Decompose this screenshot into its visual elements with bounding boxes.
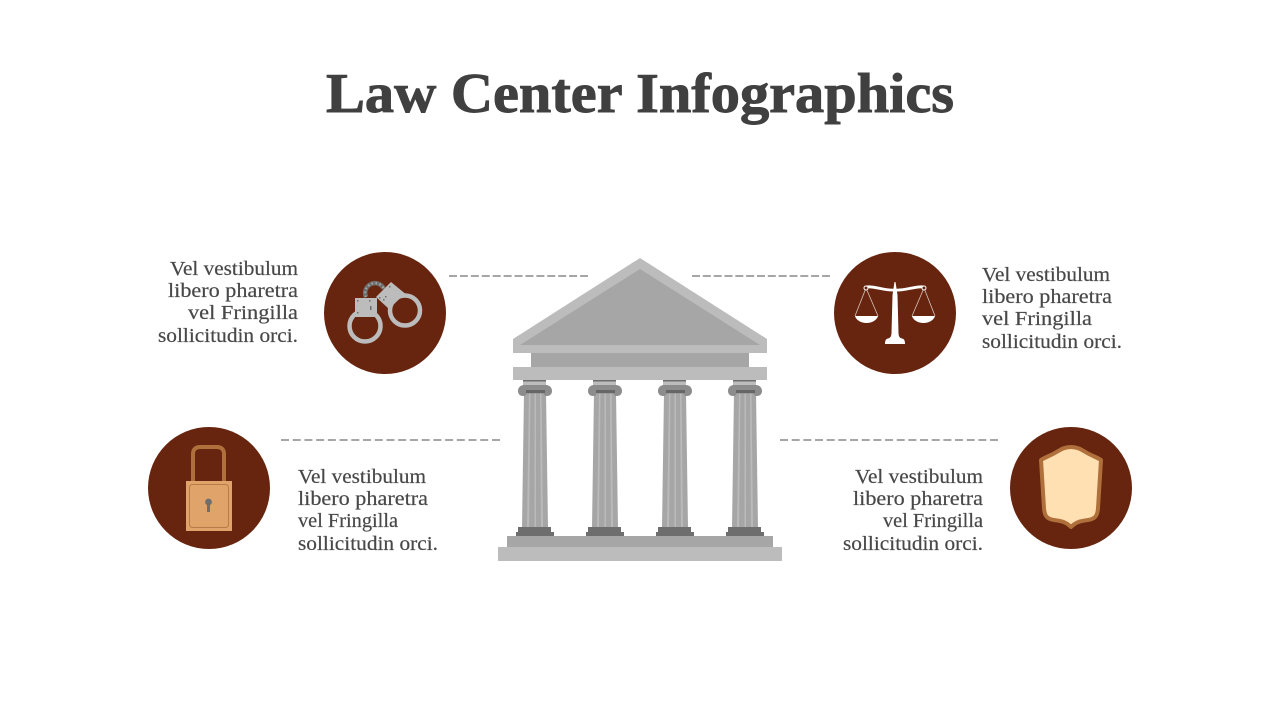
column 1 [516, 380, 554, 536]
icon: padlock [148, 427, 270, 549]
text block: bottom right: libero pharetra [853, 488, 983, 510]
text block: bottom left: Vel vestibulum [298, 466, 426, 488]
text block: top right: sollicitudin orci. [982, 331, 1122, 353]
roof pediment [513, 258, 767, 353]
text block: bottom left: vel Fringilla [298, 510, 398, 532]
connector: top right [692, 275, 830, 277]
text block: top left: sollicitudin orci. [158, 325, 298, 347]
text block: top right: libero pharetra [982, 286, 1112, 308]
icon: handcuffs [324, 252, 446, 374]
text block: bottom right: vel Fringilla [883, 510, 983, 532]
text block: top left: vel Fringilla [188, 302, 298, 324]
frieze [531, 353, 749, 367]
text block: bottom left: sollicitudin orci. [298, 533, 438, 555]
column 3 [656, 380, 694, 536]
connector: bottom left [281, 439, 500, 441]
column 4 [726, 380, 764, 536]
icon: scales of justice [834, 252, 956, 374]
text block: top right: vel Fringilla [982, 308, 1092, 330]
connector: bottom right [780, 439, 998, 441]
column 2 [586, 380, 624, 536]
text block: bottom left: libero pharetra [298, 488, 428, 510]
title: Law Center Infographics [326, 63, 954, 125]
text block: bottom left [298, 466, 438, 555]
text block: top left [158, 258, 298, 347]
text block: top right [982, 264, 1122, 353]
upper step [507, 536, 773, 547]
cornice [513, 367, 767, 380]
icon: shield [1010, 427, 1132, 549]
text block: top left: libero pharetra [168, 280, 298, 302]
text block: top right: Vel vestibulum [982, 264, 1110, 286]
text block: bottom right: sollicitudin orci. [843, 533, 983, 555]
connector: top left [449, 275, 588, 277]
text block: bottom right: Vel vestibulum [855, 466, 983, 488]
lower step [498, 547, 782, 561]
text block: bottom right [843, 466, 983, 555]
illustration: courthouse building [498, 258, 782, 561]
text block: top left: Vel vestibulum [170, 258, 298, 280]
